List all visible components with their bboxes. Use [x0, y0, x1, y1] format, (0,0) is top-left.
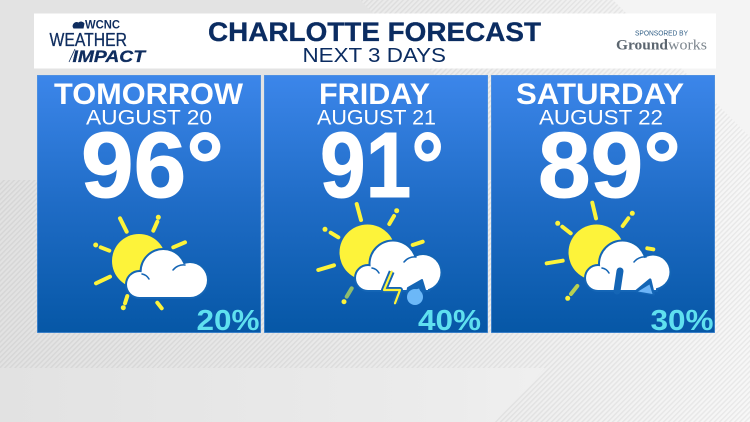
- precipitation chance: 20%: [196, 305, 260, 337]
- day heading: TOMORROW: [54, 78, 243, 111]
- icon: sun and cloud: [93, 215, 207, 310]
- date: AUGUST 20: [86, 106, 212, 130]
- sponsor logo: Groundworks: Ground: [616, 37, 668, 53]
- sponsor logo: Groundworks: [616, 37, 707, 53]
- sponsor logo: Groundworks: works: [668, 37, 707, 53]
- precipitation chance: 40%: [418, 305, 481, 337]
- temperature: 96°: [81, 113, 224, 217]
- precipitation chance: 30%: [650, 305, 714, 337]
- panel: Saturday: [491, 75, 715, 337]
- logo: WCNC Weather Impact: [50, 18, 147, 66]
- icon: sun, cloud and rain: [547, 203, 670, 301]
- header bar: [34, 14, 716, 68]
- date: AUGUST 21: [317, 106, 436, 130]
- subtitle: NEXT 3 DAYS: [302, 44, 446, 67]
- sponsor label: SPONSORED BY: [635, 30, 688, 38]
- day heading: SATURDAY: [516, 78, 684, 111]
- date: AUGUST 22: [539, 106, 663, 130]
- temperature: 91°: [320, 113, 444, 217]
- panel: Tomorrow: [37, 75, 261, 337]
- title: CHARLOTTE FORECAST: [208, 17, 541, 47]
- temperature: 89°: [538, 113, 681, 217]
- day heading: FRIDAY: [319, 78, 430, 111]
- logo: WCNC Weather Impact: IMPACT: [72, 47, 147, 66]
- logo: WCNC Weather Impact: WCNC: [85, 18, 120, 32]
- panel: Friday: [264, 75, 488, 337]
- logo: WCNC Weather Impact: WEATHER: [50, 30, 127, 50]
- icon: sun, cloud, lightning and rain: [318, 204, 440, 305]
